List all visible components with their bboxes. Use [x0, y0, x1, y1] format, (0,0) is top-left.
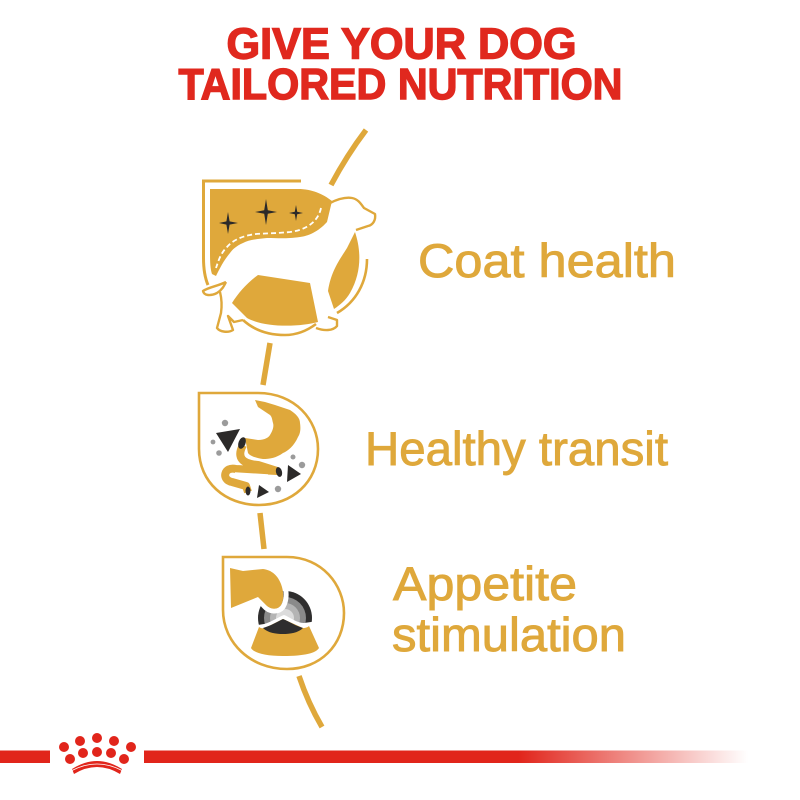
title [178, 20, 622, 109]
icon: appetite stimulation [223, 557, 344, 669]
icon: coat health dog [203, 181, 375, 335]
connecting line: bottom segment [299, 676, 322, 727]
footer bar right [144, 750, 748, 763]
footer bar left [0, 750, 50, 763]
label: appetite stimulation: stimulation [392, 608, 626, 661]
title: GIVE YOUR DOG [226, 20, 576, 68]
label: coat health: Coat health [418, 234, 676, 287]
icon: healthy transit [199, 393, 318, 505]
label: healthy transit: Healthy transit [365, 422, 668, 475]
connecting line: top segment [331, 130, 366, 185]
title: TAILORED NUTRITION [178, 60, 622, 109]
connecting line: third segment [260, 513, 264, 549]
label: appetite stimulation: Appetite [393, 557, 577, 610]
connecting line: second segment [263, 343, 270, 385]
label: appetite stimulation [392, 557, 626, 661]
icon: royal canin crown [59, 733, 136, 774]
